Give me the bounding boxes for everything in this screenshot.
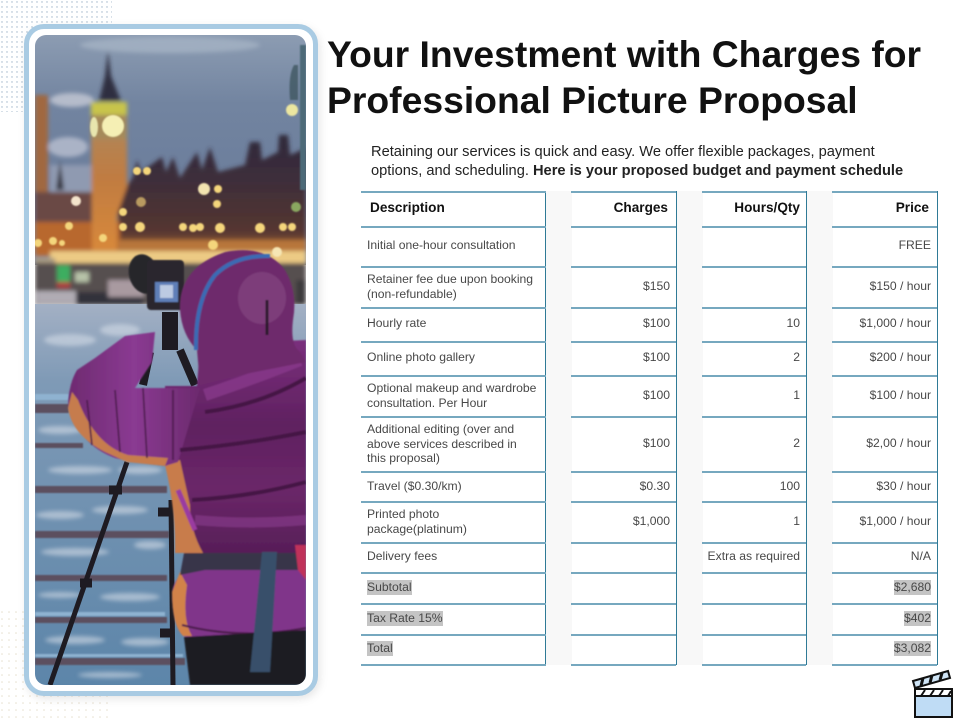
lamp post xyxy=(286,45,306,190)
row: online photo gallery: Online photo gallery xyxy=(367,350,475,364)
price: $3,082 xyxy=(894,641,931,655)
waist xyxy=(180,553,306,575)
strap xyxy=(250,552,277,672)
photo: photographer at Big Ben xyxy=(35,35,306,685)
pants xyxy=(184,630,306,685)
camera xyxy=(124,251,184,310)
quantity: 1 xyxy=(793,388,800,402)
charge: $150 xyxy=(643,279,670,293)
river xyxy=(35,304,306,689)
price: $2,00 / hour xyxy=(866,436,931,450)
clock faces xyxy=(102,115,124,137)
row: subtotal: Subtotal xyxy=(367,580,412,594)
title: Professional Picture Proposal xyxy=(327,79,858,121)
railings xyxy=(35,394,185,665)
charge: $1,000 xyxy=(633,514,670,528)
jacket xyxy=(68,250,306,685)
hood xyxy=(180,250,306,385)
arm xyxy=(68,332,200,466)
embankment xyxy=(35,263,306,305)
charge: $100 xyxy=(643,316,670,330)
row: hourly rate: Hourly rate xyxy=(367,316,426,330)
title xyxy=(327,33,921,121)
quantity: 2 xyxy=(793,436,800,450)
quantity: Extra as required xyxy=(708,549,800,563)
bright light band xyxy=(50,251,306,263)
row: additional editing: Additional editing (over and xyxy=(367,422,514,436)
price: $402 xyxy=(904,611,931,625)
quantity: 1 xyxy=(793,514,800,528)
header: Price: Price xyxy=(896,200,929,215)
header: Charges: Charges xyxy=(614,200,668,215)
dot pattern: bottom left xyxy=(1,611,108,718)
charge: $0.30 xyxy=(640,479,670,493)
price: $150 / hour xyxy=(870,279,931,293)
intro text: Retaining our services is quick and easy. We offer flexible packages, payment xyxy=(371,144,875,160)
price: $1,000 / hour xyxy=(859,514,931,528)
row: additional editing xyxy=(367,422,517,465)
price: free: FREE xyxy=(899,238,931,252)
quantity: 100 xyxy=(780,479,800,493)
row: makeup and wardrobe xyxy=(367,381,536,410)
price: $100 / hour xyxy=(870,388,931,402)
photo frame xyxy=(24,24,318,696)
row: printed photo package: package(platinum) xyxy=(367,522,467,536)
body xyxy=(165,340,306,553)
intro text xyxy=(371,144,903,178)
Big Ben xyxy=(91,105,127,250)
intro text: options, and scheduling. Here is your proposed budget and payment schedule xyxy=(371,162,903,178)
sky xyxy=(35,35,306,265)
icon: clapperboard xyxy=(912,670,953,718)
row: total: Total xyxy=(367,641,393,655)
city lights xyxy=(34,167,301,257)
charge: $100 xyxy=(643,350,670,364)
row: retainer fee: Retainer fee due upon booking xyxy=(367,272,533,286)
row: additional editing: this proposal) xyxy=(367,451,440,465)
row: printed photo package xyxy=(367,507,467,536)
quantity: 10 xyxy=(786,316,800,330)
price: $2,680 xyxy=(894,580,931,594)
quantity: 2 xyxy=(793,350,800,364)
title: Your Investment with Charges for xyxy=(327,33,921,75)
price: $1,000 / hour xyxy=(859,316,931,330)
row: initial consultation: Initial one-hour consultation xyxy=(367,238,515,252)
row: makeup and wardrobe: consultation. Per Hour xyxy=(367,396,487,410)
row: retainer fee: (non-refundable) xyxy=(367,286,457,300)
charge: $100 xyxy=(643,388,670,402)
row: printed photo package: Printed photo xyxy=(367,507,439,521)
lower orange glow xyxy=(35,222,120,256)
lower jacket xyxy=(172,567,306,640)
charge: $100 xyxy=(643,436,670,450)
row: retainer fee xyxy=(367,272,533,300)
header: Description: Description xyxy=(370,200,445,215)
row: additional editing: above services described in xyxy=(367,436,517,450)
price: N/A xyxy=(911,549,931,563)
dot pattern: top left xyxy=(1,1,112,112)
palace xyxy=(118,135,306,255)
price: $200 / hour xyxy=(870,350,931,364)
row: makeup and wardrobe: Optional makeup and wardrobe xyxy=(367,381,536,395)
header: Hours/Qty: Hours/Qty xyxy=(734,200,800,215)
row: tax rate: Tax Rate 15% xyxy=(367,611,443,625)
row: delivery fees: Delivery fees xyxy=(367,549,437,563)
row: travel: Travel ($0.30/km) xyxy=(367,479,462,493)
price: $30 / hour xyxy=(876,479,931,493)
tripod xyxy=(50,312,195,685)
left tower xyxy=(35,95,48,192)
